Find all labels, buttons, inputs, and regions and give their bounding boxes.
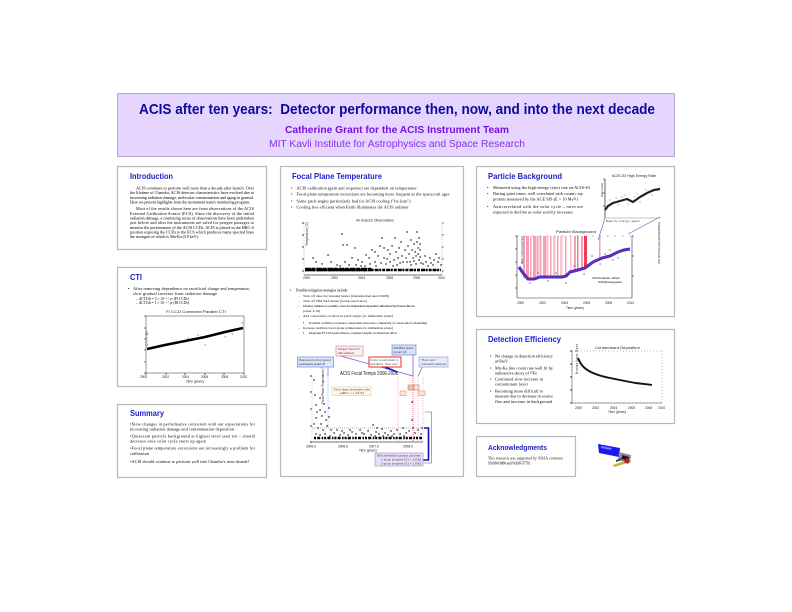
chart: focal temperature timeline with callouts: Time (years) xyxy=(359,448,377,452)
heading: acknowledgments: Acknowledgments xyxy=(488,443,547,452)
mitigation strategies list: Degrades FI CCD performance, requires lengthy recalibration effort xyxy=(309,331,397,336)
chart: focal temperature timeline with callouts xyxy=(298,345,448,466)
chart: focal temperature timeline with callouts: Focal Plane Temperature (°C) xyxy=(321,364,325,404)
particle background bullets: Measured using the high-energy reject rate on ACIS-S3 xyxy=(493,185,590,190)
chart: inset background zoom xyxy=(600,174,661,223)
callout: bakeout heater xyxy=(298,357,334,367)
callout: point constrained: minimize "bad area" xyxy=(370,362,398,366)
callout: pitch and yaw xyxy=(336,346,363,356)
mitigation strategies list: Develop calibrator to partially correct for temperature dependent calibration (See Posson-Brown xyxy=(303,304,415,308)
mitigation strategies list: Turn off detector housing heater (implemented April 2008) xyxy=(303,294,389,298)
summary bullets: •Slow changes in performance consistent with our expectations for xyxy=(130,422,256,426)
purple bracket xyxy=(423,412,432,463)
detection efficiency bullets: radioactive decay of ⁵⁵Fe xyxy=(495,370,537,376)
mitigation strategies list: – xyxy=(297,326,300,330)
particle background bullets: • xyxy=(487,191,489,196)
callout: pitch and yaw: Pat/gas "bad roll" xyxy=(338,347,360,351)
chart: particle background long-term: ACE SIS Proton Flux (p/cm2/s/sr/MeV) xyxy=(657,222,661,264)
chart: FI CCD corrected parallel CTI xyxy=(140,309,247,384)
detection efficiency bullets: Mn-Ka line count rate well fit by xyxy=(495,366,554,370)
panel: summary xyxy=(118,404,266,478)
callout: EM heater: turned off xyxy=(394,350,407,354)
detection efficiency bullets: contaminant layer xyxy=(495,382,529,386)
summary bullets: •ACIS should continue to perform well into Chandra's next decade! xyxy=(130,459,249,464)
background rate curve xyxy=(519,249,630,279)
summary bullets: increasing radiation damage and contamination deposition xyxy=(130,426,235,432)
particle background bullets: • xyxy=(487,204,489,209)
callout: calibration accuracy: 2-array airspeed (T1 = 2 KK) xyxy=(381,462,421,466)
chart: focal temperature timeline with callouts: 2008.0 xyxy=(403,444,413,448)
chart: all science observations scatter: Temperature (°C) xyxy=(305,222,309,246)
chart: all science observations scatter: 2002 xyxy=(331,276,338,280)
introduction text: Here we present highlights from the instrument team's monitoring program. xyxy=(130,200,250,204)
chart: particle background long-term: ACIS-S3 HE rate + 80 keV xyxy=(592,276,620,280)
chart: particle background long-term: Time (years) xyxy=(566,306,584,310)
panel: focal plane temperature xyxy=(280,166,464,476)
callout connector lines xyxy=(328,354,423,376)
detection efficiency bullets: Becoming more difficult to xyxy=(495,388,543,394)
chart: FI CCD corrected parallel CTI: 2008 xyxy=(221,375,228,379)
focal plane bullets: • xyxy=(291,186,293,190)
callout: bad sun xyxy=(419,357,448,367)
heading: detection efficiency: Detection Efficiency xyxy=(488,334,561,344)
CTI bullets: – xyxy=(135,301,138,305)
detection efficiency bullets xyxy=(490,354,554,404)
introduction text: External Calibration Source (ECS). Since the discovery of the initial xyxy=(130,211,255,216)
chart: FI CCD corrected parallel CTI: Time (years) xyxy=(186,380,204,384)
chart: FI CCD corrected parallel CTI: 2000 xyxy=(140,375,147,379)
chart: FI CCD corrected parallel CTI: CTI × 10⁴ xyxy=(145,329,149,346)
detection efficiency bullets: flux and increase in background xyxy=(495,399,553,404)
detection efficiency bullets: Continued slow increase in xyxy=(495,376,544,382)
focal plane bullets: Cooling less efficient when Earth illuminates the ACIS radiator xyxy=(296,204,409,210)
mitigation strategies list: Turn off SIM TAA heater (being tested now) xyxy=(303,299,367,303)
detection efficiency bullets: No change in detection efficiency xyxy=(495,354,554,358)
detection efficiency bullets: • xyxy=(490,388,492,394)
chart: all science observations scatter: 2010 xyxy=(438,276,445,280)
panel: detection efficiency xyxy=(476,330,674,424)
particle background bullets xyxy=(487,185,590,214)
heading: particle background: Particle Background xyxy=(488,171,562,181)
introduction text: the lifetime of Chandra, ACIS detector characteristics have evolved due to xyxy=(130,190,254,196)
mitigation strategies list: Add constraints on allowed pitch angles (to immediate plans) xyxy=(303,314,393,318)
mitigation strategies list: – xyxy=(297,304,300,308)
focal plane bullets: • xyxy=(291,198,293,204)
introduction text: increasing radiation damage, molecular contamination and aging in general. xyxy=(130,195,254,201)
heading: focal plane temperature: Focal Plane Temperature xyxy=(292,171,382,181)
callout: point constrained: Point constrained to xyxy=(370,358,399,362)
CTI bullets: ΔCTI/dt = 1 × 10⁻⁶ / yr (BI CCDs) xyxy=(139,301,190,305)
CTI bullets: After removing dependence on sacrificial charge and temperature, xyxy=(133,286,250,292)
callout: EM heater: EM/HXA heater xyxy=(394,346,414,350)
small event tags xyxy=(400,385,425,396)
introduction text xyxy=(129,186,255,239)
chart: particle background long-term: 2010 xyxy=(627,301,634,305)
chart: particle background long-term: Rate (cts/frame/chip) xyxy=(520,236,524,264)
summary bullets: •Focal plane temperature excursions are increasingly a problem for xyxy=(130,446,256,450)
CTI bullets: ΔCTI/dt = 3 × 10⁻⁶ / yr (FI CCDs) xyxy=(139,297,190,301)
chart: particle background long-term: 2008 xyxy=(605,301,612,305)
panel: CTI xyxy=(118,268,266,386)
title: ACIS after ten years: Detector performance then, now, and into the next decade xyxy=(139,102,655,118)
CTI bullets xyxy=(128,286,250,305)
introduction text: ACIS continues to perform well more than a decade after launch. Over xyxy=(136,186,255,190)
panel: introduction xyxy=(118,166,266,250)
heading: summary: Summary xyxy=(130,408,164,418)
solar flare bars xyxy=(523,236,600,278)
chart: contamination deposition: 2002 xyxy=(592,406,599,410)
chart: focal temperature timeline with callouts: ACIS Focal Temps 2006-2008 xyxy=(340,371,398,377)
callout: mean derivative rule: (dRT/t = 1.25°K) xyxy=(340,391,364,395)
icon: Chandra satellite xyxy=(598,444,631,467)
focal plane bullets: • xyxy=(291,192,293,196)
chart: FI CCD corrected parallel CTI: FI CCD Corrected Parallel CTI xyxy=(166,309,226,314)
callout: calibration accuracy: Old calibration accuracy goal met: xyxy=(377,454,421,458)
chart: contamination deposition: 2008 xyxy=(645,406,652,410)
acknowledgments text xyxy=(488,456,564,466)
author line: Catherine Grant for the ACIS Instrument Team xyxy=(285,125,509,136)
callout: pitch and yaw: time reduced xyxy=(338,351,355,355)
mitigation strategies list: – xyxy=(297,314,300,318)
chart: particle background long-term: 2002 xyxy=(539,301,546,305)
rate scatter points xyxy=(522,250,618,283)
detection efficiency bullets: • xyxy=(490,376,492,382)
acknowledgments text: NAS8-03060 and NAS8-37716. xyxy=(488,462,531,466)
chart: contamination deposition: 2004 xyxy=(610,406,617,410)
callout: bakeout heater: permanently turned off xyxy=(299,362,325,366)
chart: inset background zoom: Rate by energy region xyxy=(606,219,640,223)
mitigation strategies list: ▪ xyxy=(303,321,304,325)
mitigation strategies list: • xyxy=(290,288,292,292)
callout: calibration accuracy xyxy=(375,453,423,466)
focal plane bullets: • xyxy=(291,204,293,210)
callout: mean derivative rule xyxy=(332,387,371,396)
chart: all science observations scatter: All Science Observations xyxy=(356,218,394,222)
chart: inset background zoom: ACIS-S3 High Energy Rate xyxy=(612,174,656,178)
blue bracket xyxy=(423,428,428,460)
chart: contamination deposition: Normalized Rate xyxy=(575,344,579,374)
chart: all science observations scatter: 2004 xyxy=(358,276,365,280)
summary bullets: decrease once solar cycle starts up again xyxy=(130,438,207,444)
introduction text: radiation damage, a continuing series of observations have been undertaken xyxy=(130,216,255,222)
summary bullets: calibration xyxy=(130,451,150,456)
introduction text: the strongest of which is Mn-Ka (5.9 keV). xyxy=(130,234,199,239)
chart: all science observations scatter: 2008 xyxy=(413,276,420,280)
chart: FI CCD corrected parallel CTI: 2006 xyxy=(201,375,208,379)
detection efficiency bullets: • xyxy=(490,366,492,370)
summary bullets: •Quiescent particle background at highest level seen yet – should xyxy=(130,434,256,438)
CTI bullets: slow gradual increase from radiation damage xyxy=(133,291,217,296)
detection efficiency bullets: • xyxy=(490,354,492,358)
callout: bakeout heater: Bakeout-flowing heater xyxy=(299,358,331,362)
panel: particle background xyxy=(476,166,674,316)
chart: all science observations scatter xyxy=(302,218,445,280)
chart: focal temperature timeline with callouts: 2006.8 xyxy=(338,444,348,448)
callout: mean derivative rule: Fit to mean derivative rule xyxy=(334,388,370,392)
chart: all science observations scatter: 2006 xyxy=(386,276,393,280)
particle background bullets: protons measured by the ACE SIS (E > 10 MeV) xyxy=(493,196,579,202)
chart: contamination deposition: 2000 xyxy=(575,406,582,410)
panel: acknowledgments xyxy=(476,436,576,476)
chart: focal temperature timeline with callouts: 2006.0 xyxy=(306,444,316,448)
mitigation strategies list: Possible conflicts w/science constraints, increases complexity of observation scheduling xyxy=(309,321,427,326)
particle background bullets: • xyxy=(487,185,489,190)
chart: contamination deposition: Time (years) xyxy=(608,410,626,414)
callout: bad sun: constraint removed xyxy=(421,362,447,366)
detection efficiency bullets: measure due to decrease in source xyxy=(495,394,553,398)
mitigation strategies list: – xyxy=(297,294,300,298)
introduction text: position exposing the CCDs to the ECS which produces many spectral lines xyxy=(130,230,254,234)
chart: particle background long-term xyxy=(515,222,661,310)
chart: contamination deposition xyxy=(570,344,665,414)
inset connector lines xyxy=(598,217,660,240)
CTI bullets: – xyxy=(135,297,138,301)
callout: calibration accuracy: 1-array airspeed (T1 = 2 KK) xyxy=(381,458,421,462)
chart: FI CCD corrected parallel CTI: 2010 xyxy=(240,375,247,379)
introduction text: Most of the results shown here are from observations of the ACIS xyxy=(136,206,255,211)
institute line: MIT Kavli Institute for Astrophysics and Space Research xyxy=(269,139,525,150)
detection efficiency bullets: at 6 keV xyxy=(495,358,508,364)
introduction text: just before and after the instruments are safed for perigee passages to xyxy=(129,220,254,225)
chart: particle background long-term: 2000 xyxy=(517,301,524,305)
focal plane bullets: Some pitch angles particularly bad for ACIS cooling ("lst-lsun") xyxy=(296,198,411,204)
mitigation strategies list: poster 2.19) xyxy=(303,309,320,313)
focal plane bullets xyxy=(291,186,450,210)
heading: CTI: CTI xyxy=(130,272,142,282)
CTI bullets: • xyxy=(128,286,130,291)
chart: FI CCD corrected parallel CTI: 2004 xyxy=(182,375,189,379)
chart: all science observations scatter: 2000 xyxy=(303,276,310,280)
acknowledgments text: This research was supported by NASA contracts xyxy=(488,456,564,460)
header banner xyxy=(118,94,674,156)
chart: particle background long-term: Particle Background xyxy=(556,230,596,234)
chart: particle background long-term: 2006 xyxy=(583,301,590,305)
chart: particle background long-term: 2004 xyxy=(561,301,568,305)
mitigation strategies list xyxy=(290,288,427,336)
chart: particle background long-term: ACE high-energy protons xyxy=(598,280,623,284)
introduction text: monitor the performance of the ACIS CCDs. ACIS is placed in the HRC-S xyxy=(130,225,255,230)
particle background bullets: expected to decline as solar activity increases xyxy=(493,210,573,214)
mitigation strategies list: Increase nominal focal plane temperature (to immediate plans) xyxy=(303,326,393,330)
focal plane bullets: ACIS calibration (gain and response) are dependent on temperature xyxy=(296,186,417,190)
callout: point constrained xyxy=(369,357,401,367)
chart: inset background zoom: Rate (cts/s) xyxy=(600,183,604,197)
callout: bad sun: "Bad-sun" xyxy=(421,358,436,362)
chart: focal temperature timeline with callouts: 2007.6 xyxy=(369,444,379,448)
chart: contamination deposition: 2006 xyxy=(628,406,635,410)
mitigation strategies list: – xyxy=(297,299,300,303)
focal plane bullets: Focal plane temperature excursions are becoming more frequent as the spacecraft ages xyxy=(296,192,450,196)
summary bullets xyxy=(130,422,256,464)
callout: EM heater xyxy=(392,345,416,355)
proton flux curve xyxy=(519,249,630,279)
heading: introduction: Introduction xyxy=(130,171,173,181)
particle background bullets: During quiet times, well correlated with cosmic ray xyxy=(493,191,584,197)
chart: contamination deposition: 2010 xyxy=(658,406,665,410)
chart: contamination deposition: Contaminant Deposition xyxy=(595,346,640,350)
chart: FI CCD corrected parallel CTI: 2002 xyxy=(162,375,169,379)
particle background bullets: Anticorrelated with the solar cycle – rates are xyxy=(493,204,583,209)
mitigation strategies list: ▪ xyxy=(303,331,304,335)
mitigation strategies list: Possible mitigation strategies include: xyxy=(296,288,348,292)
